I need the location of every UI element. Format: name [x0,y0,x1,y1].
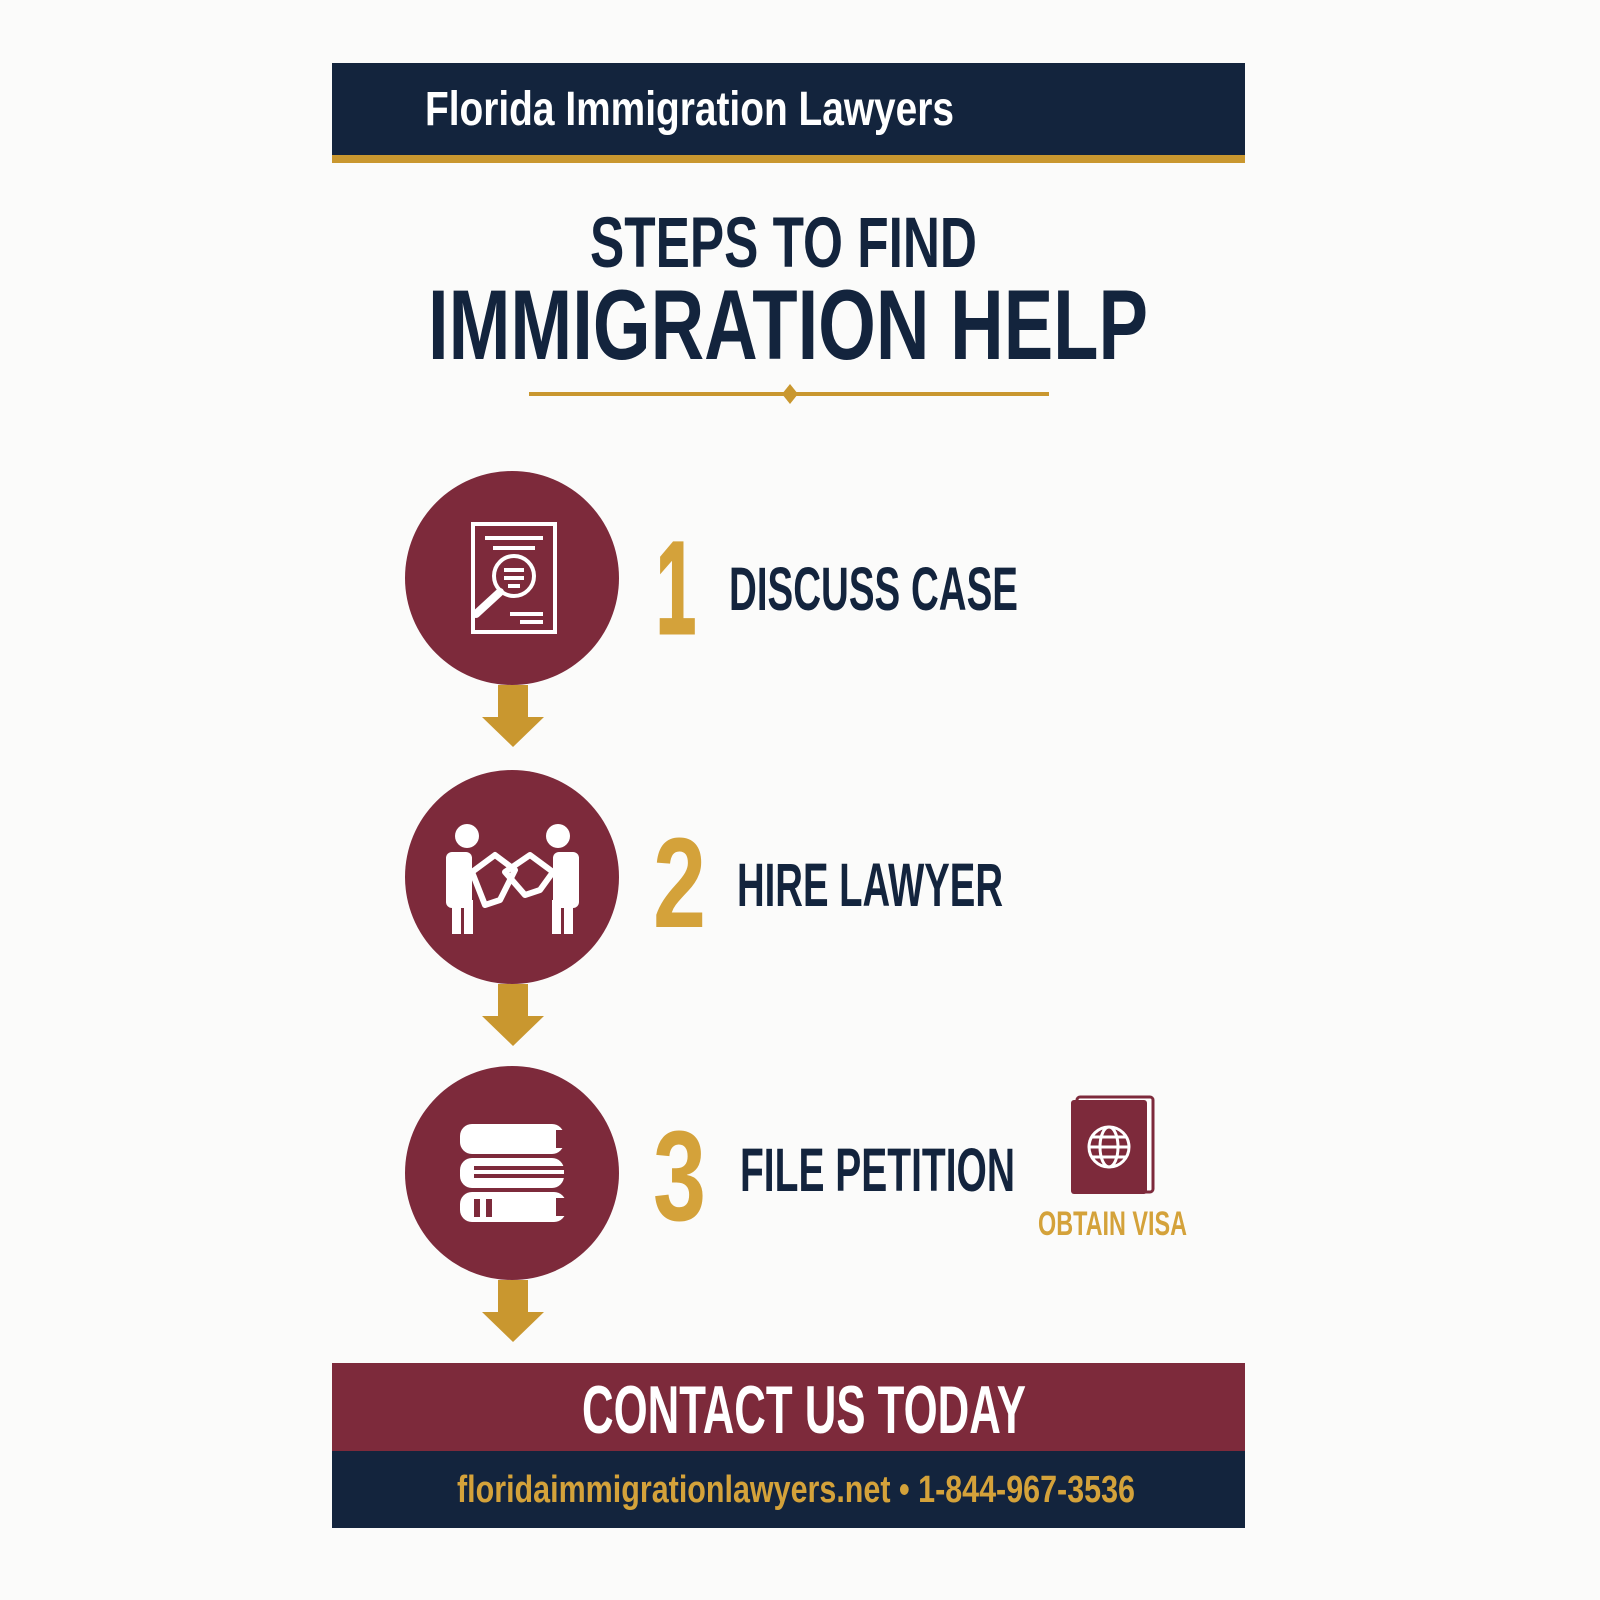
title: IMMIGRATION HELP [428,269,1148,380]
footer contact info: floridaimmigrationlawyers.net • 1-844-967-3536 [457,1469,1135,1511]
icon: passport [1071,1097,1153,1194]
step 3 [405,1066,1015,1280]
label: hire lawyer: HIRE LAWYER [737,851,1003,919]
icon: document with magnifier [405,471,619,685]
icon: books [405,1066,619,1280]
step 2 [405,770,1003,984]
icon: handshake [405,770,619,984]
number 3: 3 [653,1105,706,1248]
header bar: Florida Immigration Lawyers [425,83,954,136]
number 1: 1 [656,514,696,661]
arrow 3 [482,1280,544,1342]
label: file petition: FILE PETITION [740,1136,1015,1204]
arrow 1 [482,685,544,747]
title: STEPS TO FIND [590,204,977,283]
label: discuss case: DISCUSS CASE [729,555,1018,623]
title divider [529,384,1049,404]
header bar [332,63,1245,163]
contact banner [332,1363,1245,1451]
contact banner: CONTACT US TODAY [582,1372,1026,1448]
step 1 [405,471,1018,685]
footer contact info [332,1451,1245,1528]
arrow 2 [482,984,544,1046]
number 2: 2 [653,812,706,955]
title [428,204,1148,380]
label: obtain visa: OBTAIN VISA [1038,1205,1187,1243]
